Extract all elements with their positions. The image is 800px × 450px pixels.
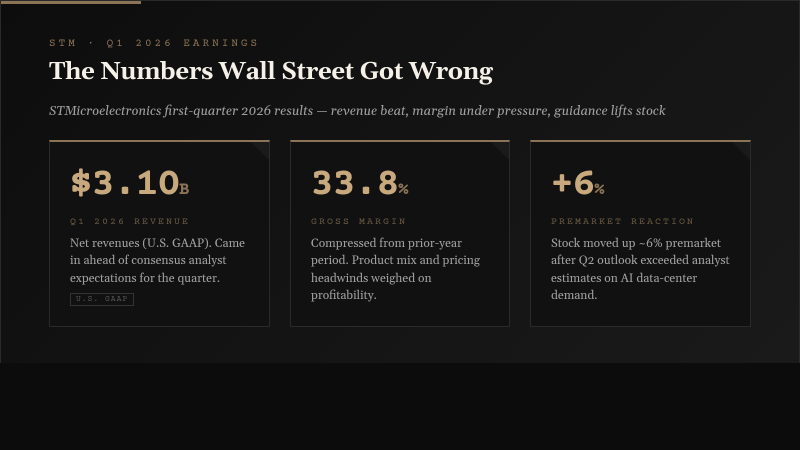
revenue figure: $3.10B bbox=[69, 163, 190, 208]
panel: gross margin card bbox=[290, 140, 510, 327]
reaction description: Stock moved up ~6% premarket after Q2 outlook exceeded analyst estimates on AI data-center demand. bbox=[551, 237, 730, 304]
corner accent bbox=[732, 142, 750, 160]
reaction label: PREMARKET REACTION bbox=[551, 217, 695, 228]
tag: U.S. GAAP bbox=[70, 293, 134, 306]
revenue label: Q1 2026 REVENUE bbox=[70, 217, 190, 228]
margin figure: 33.8% bbox=[310, 163, 409, 208]
eyebrow label: STM · Q1 2026 EARNINGS bbox=[49, 37, 260, 50]
panel: revenue card bbox=[49, 140, 270, 327]
margin label: GROSS MARGIN bbox=[311, 217, 407, 228]
tag: U.S. GAAP: U.S. GAAP bbox=[76, 295, 128, 304]
reaction figure: +6% bbox=[550, 163, 605, 208]
corner accent bbox=[491, 142, 509, 160]
progress bar bbox=[0, 1, 141, 4]
subtitle: STMicroelectronics first-quarter 2026 results — revenue beat, margin under pressure, guidance lifts stock bbox=[49, 104, 666, 120]
margin description: Compressed from prior-year period. Product mix and pricing headwinds weighed on profitability. bbox=[311, 237, 480, 304]
corner accent bbox=[251, 142, 269, 160]
title: The Numbers Wall Street Got Wrong bbox=[49, 58, 493, 88]
revenue description: Net revenues (U.S. GAAP). Came in ahead of consensus analyst expectations for the quarter. bbox=[70, 237, 245, 287]
panel: premarket reaction card bbox=[530, 140, 751, 327]
